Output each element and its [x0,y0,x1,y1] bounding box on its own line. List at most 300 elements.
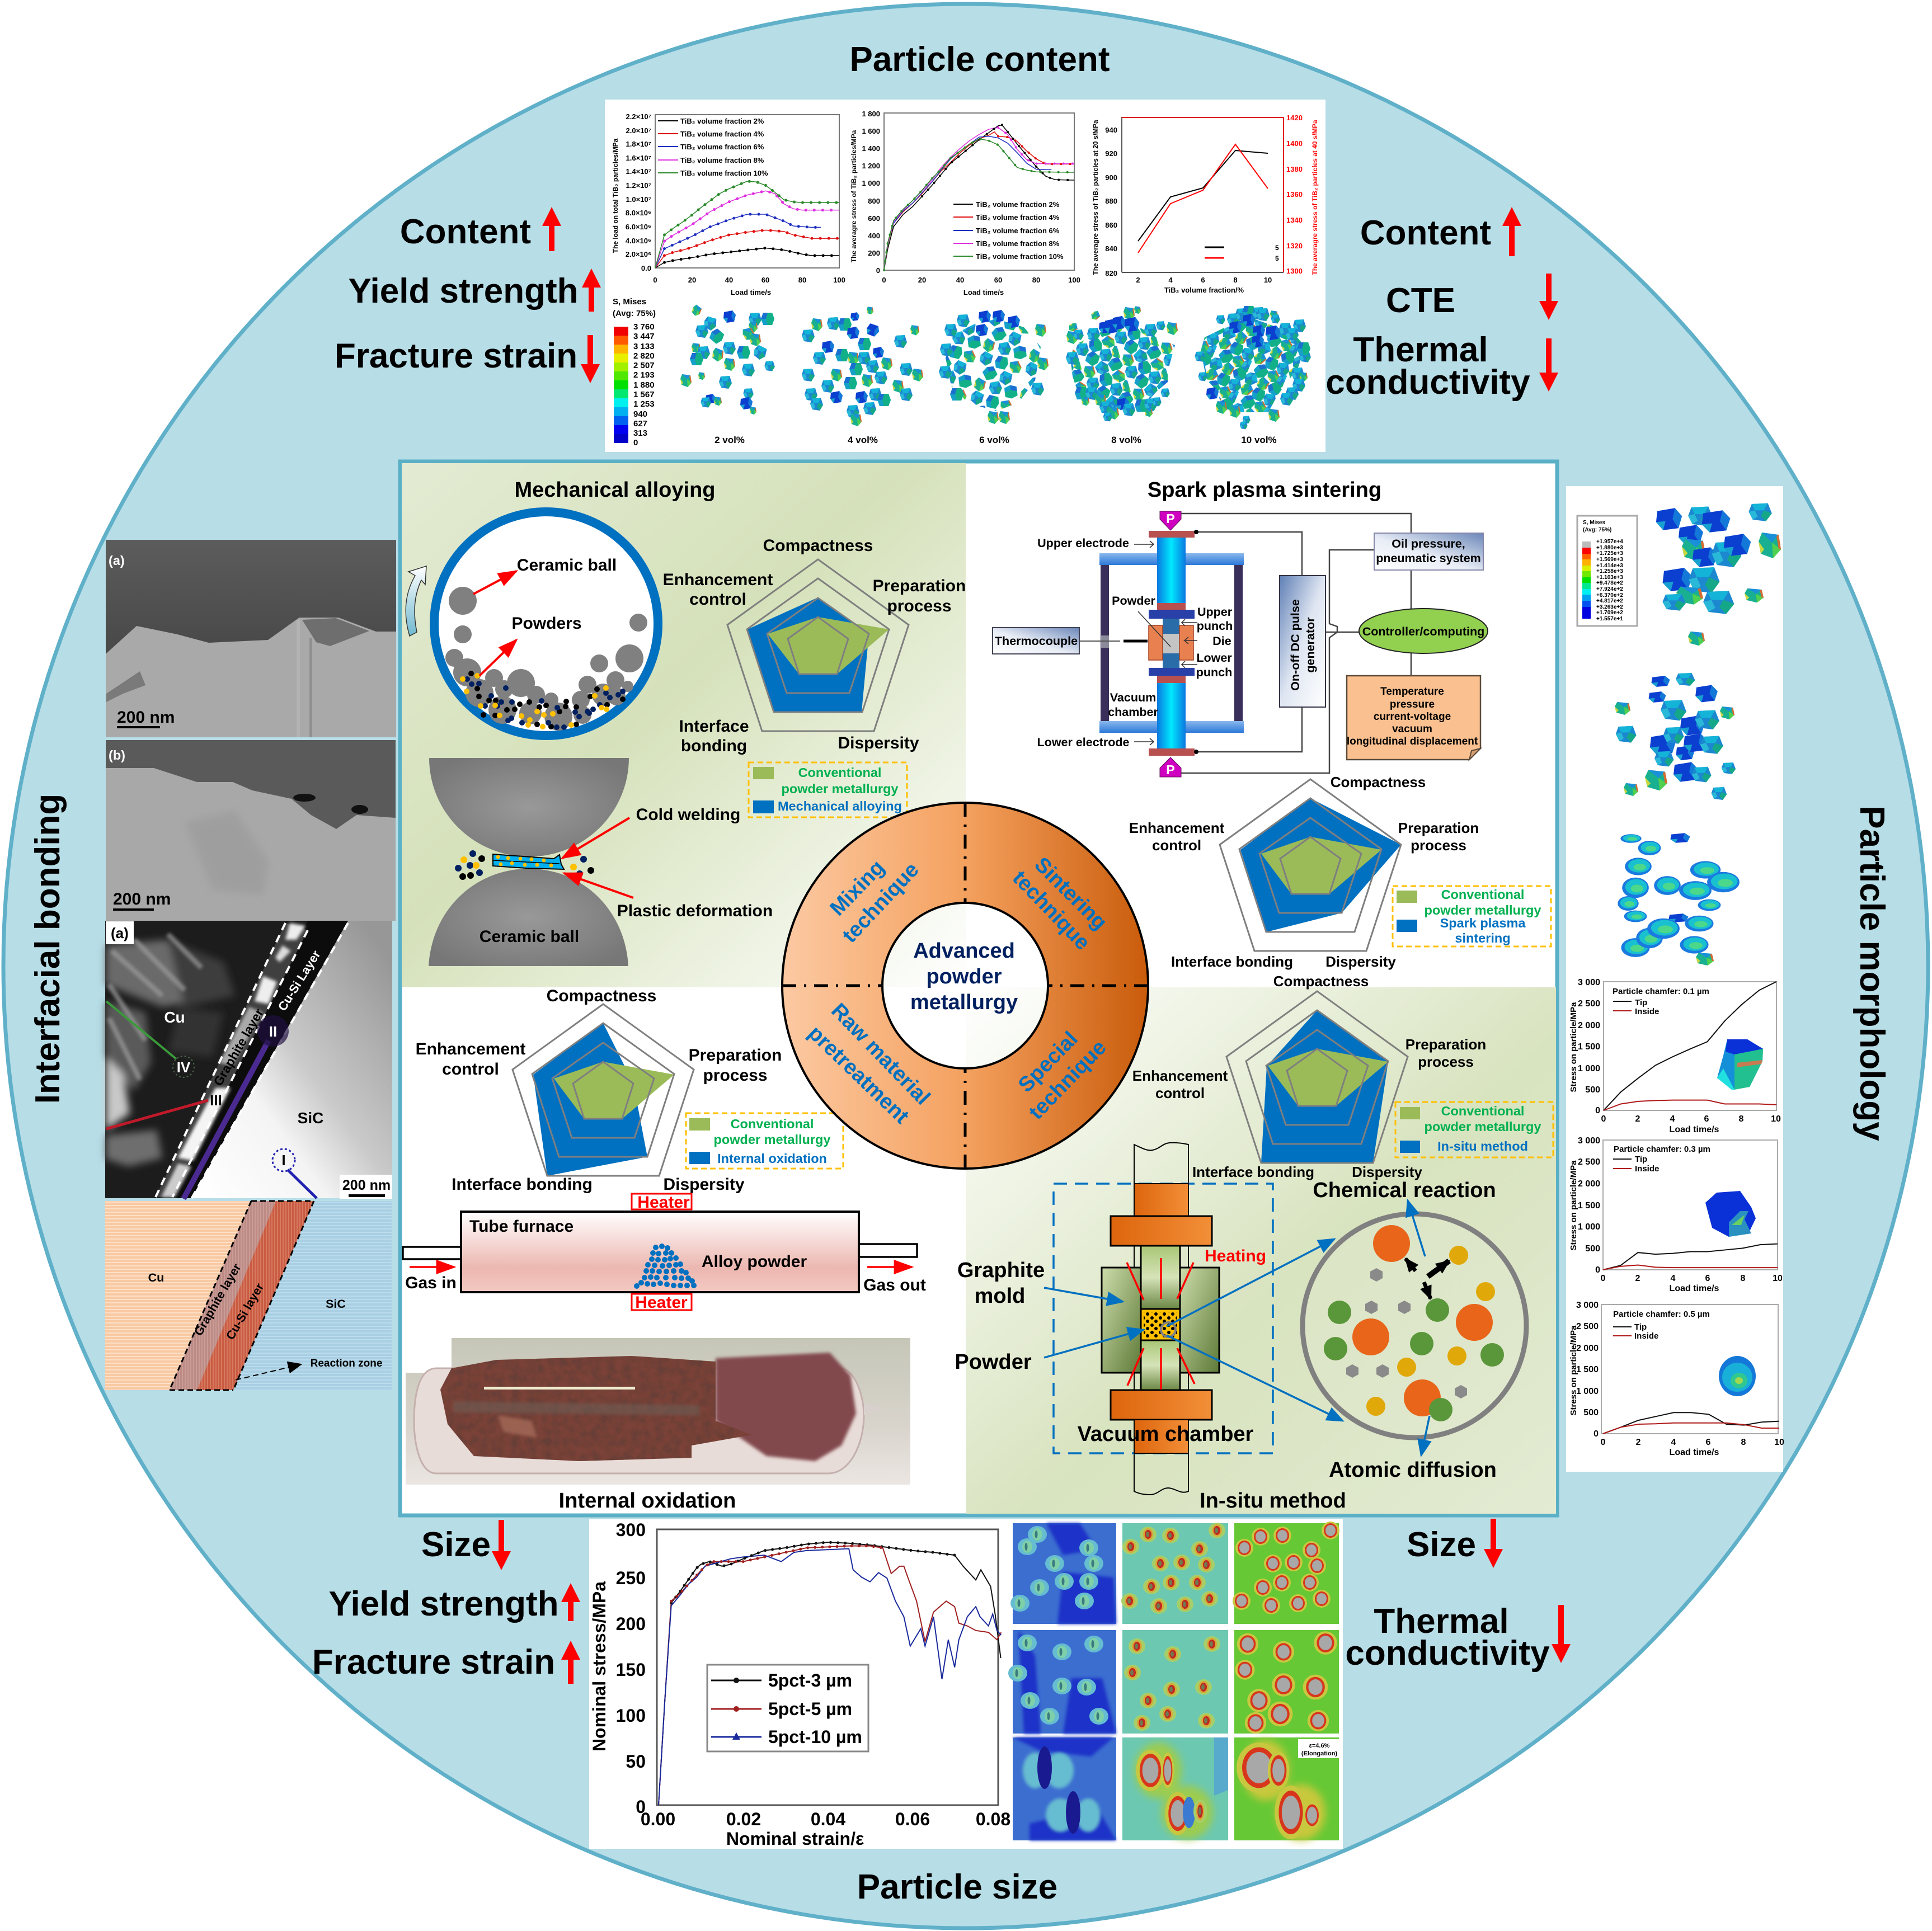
SPS apparatus: Lower [1196,651,1232,665]
bottom right effects: Thermal [1374,1602,1509,1641]
line chart: average stress: 60 [994,276,1002,284]
legend: internal oxidation [686,1113,843,1169]
box: thermocouple [993,628,1079,654]
line chart: chamfer 0.5 µm: 1 500 [1576,1365,1599,1374]
stress legend: +6.370e+2 [1596,592,1623,599]
top right effects: CTE [1386,281,1455,320]
top left effects: Fracture strain [335,337,577,375]
particle cloud: 2 vol%: 2 vol% [714,435,745,445]
legend: internal oxidation: Internal oxidation [717,1151,827,1166]
line chart: chamfer 0.1 µm: 10 [1771,1114,1781,1124]
line chart: chamfer 0.5 µm: 3 000 [1576,1301,1599,1310]
line chart: load on particles: 0 [653,276,657,284]
TEM image (a) Cu-graphite-SiC interface: 200 nm [342,1178,391,1193]
line chart: nominal stress-strain: 0.00 [641,1809,675,1829]
particle cloud: 10 vol% [1195,306,1311,445]
line chart: chamfer 0.1 µm: Particle chamfer: 0.1 µm [1613,987,1709,996]
line chart: load on particles: 1.6×10⁷ [626,154,651,162]
strain heat maps: (Elongation) [1301,1750,1337,1757]
line chart: nominal stress-strain [589,1520,1010,1849]
line chart: nominal stress-strain: Nominal stress/MPa [589,1581,609,1751]
line chart: chamfer 0.3 µm [1569,1136,1783,1293]
schematic: reaction zone: Cu [148,1271,164,1284]
central donut: pretreatment [803,1021,914,1128]
colour legend: S, Mises: 1 880 [633,380,655,390]
note: parameters: pressure [1390,699,1435,710]
caption: in-situ method: In-situ method [1200,1489,1346,1513]
heading: interfacial bonding: Interfacial bonding [29,794,67,1104]
particles: chamfered [1615,673,1736,800]
stress legend: +1.103e+3 [1596,574,1623,581]
line chart: stress vs volume fraction: The averagre stress of TiB₂ particles at 40 s/MPa [1311,120,1319,275]
line chart: chamfer 0.3 µm: 0 [1601,1274,1606,1283]
section: mechanical alloying: Mechanical alloying [515,478,715,502]
line chart: average stress: 1 200 [862,162,880,170]
colour legend: S, Mises: 1 567 [633,390,655,399]
schematic: reaction zone [105,1201,392,1390]
line chart: chamfer 0.1 µm: 2 000 [1578,1021,1600,1030]
powder heap [634,1244,697,1289]
line chart: stress vs volume fraction: 10 [1264,276,1272,284]
particle cloud: 4 vol%: 4 vol% [848,435,878,445]
strain heat maps: ε=4.6% [1309,1742,1330,1749]
line chart: chamfer 0.5 µm: 0 [1593,1429,1599,1439]
SPS apparatus: Powder [1112,594,1155,607]
line chart: nominal stress-strain: 150 [616,1660,646,1680]
line chart: load on particles: TiB₂ volume fraction 8% [680,156,764,164]
note: parameters: Temperature [1380,686,1444,698]
line chart: stress vs volume fraction: 940 [1105,126,1117,134]
TEM image (b): 200 nm [113,890,171,908]
heading: particle morphology: Particle morphology [1853,806,1891,1141]
SPS apparatus: Upper electrode [1037,536,1129,550]
schematic: reaction zone: Reaction zone [311,1358,382,1369]
top right effects: Content [1360,214,1491,252]
line chart: chamfer 0.1 µm: 2 [1635,1114,1640,1124]
central donut: technique [838,858,924,948]
line chart: stress vs volume fraction: 1420 [1286,114,1303,122]
stress legend: +1.957e+4 [1596,539,1623,545]
legend: mechanical alloying: Conventional [798,765,881,780]
line chart: chamfer 0.5 µm: 1 000 [1576,1387,1599,1396]
line chart: nominal stress-strain: 0.06 [895,1809,930,1829]
stress legend: +1.880e+3 [1596,545,1623,551]
line chart: chamfer 0.5 µm: 2 [1636,1438,1641,1447]
heading: particle content: Particle content [849,40,1110,79]
stress legend: +7.924e+2 [1596,586,1623,592]
line chart: load on particles: 80 [798,276,806,284]
line chart: average stress: TiB₂ volume fraction 2% [976,200,1060,209]
line chart: chamfer 0.1 µm: 8 [1739,1114,1744,1124]
line chart: chamfer 0.1 µm: Stress on particle/MPa [1569,1002,1578,1092]
colour legend: S, Mises: 0 [633,438,638,448]
centre title: metallurgy [910,991,1018,1014]
line chart: chamfer 0.3 µm: Stress on particle/MPa [1569,1160,1578,1250]
line chart: chamfer 0.1 µm: 500 [1585,1085,1600,1095]
stress legend: +1.258e+3 [1596,568,1623,574]
stress legend: (Avg: 75%) [1583,527,1611,533]
strain heat maps [1008,1522,1340,1840]
radar chart: spark plasma sintering [1129,774,1479,970]
stress legend: +3.263e+2 [1596,604,1623,610]
line chart: load on particles: 60 [761,276,769,284]
radar chart: spark plasma sintering: Enhancement [1129,820,1225,836]
central donut: Raw material [826,999,934,1110]
cold welding diagram: Plastic deformation [617,902,773,920]
line chart: chamfer 0.1 µm: Tip [1635,998,1647,1007]
particles: sharp [1656,503,1781,646]
line chart: chamfer 0.5 µm: 4 [1671,1438,1676,1447]
ellipse: controller [1359,609,1488,653]
line chart: chamfer 0.5 µm: 8 [1741,1438,1746,1447]
diagram: tube furnace: Alloy powder [702,1252,807,1271]
colour legend: S, Mises [613,297,656,448]
line chart: average stress: 1 400 [862,144,880,153]
TEM image (a) [106,540,396,737]
panel: particle size figures [589,1519,1343,1849]
bottom left effects: Fracture strain [312,1643,555,1682]
line chart: stress vs volume fraction: 840 [1105,244,1117,253]
diagram: in-situ sintering press: mold [975,1284,1025,1308]
line chart: stress vs volume fraction: 820 [1105,269,1117,277]
line chart: average stress: 20 [918,276,926,284]
TEM image (a) Cu-graphite-SiC interface: II [269,1023,277,1040]
bottom right effects: Size [1407,1525,1476,1564]
TEM image (a) Cu-graphite-SiC interface: I [281,1152,286,1169]
box: on-off DC pulse generator: On-off DC pulse [1289,599,1302,691]
box: on-off DC pulse generator [1280,576,1325,707]
line chart: load on particles: 6.0×10⁶ [626,223,651,231]
line chart: nominal stress-strain: Nominal strain/ε [726,1829,864,1849]
diagram: tube furnace: Gas out [863,1276,926,1294]
line chart: average stress: 40 [956,276,964,284]
line chart: average stress: 1 600 [862,127,880,135]
TEM image (a) Cu-graphite-SiC interface: Cu [164,1009,185,1026]
central donut: technique [1024,1036,1111,1124]
line chart: chamfer 0.5 µm [1569,1301,1784,1457]
icon: rotation arrow [406,566,426,636]
diagram: in-situ sintering press: Graphite [957,1259,1045,1282]
bottom left effects: Yield strength [328,1585,559,1623]
diagram: in-situ reaction circle: Chemical reaction [1313,1179,1496,1202]
SPS apparatus: P [1166,511,1175,526]
line chart: average stress: 800 [868,197,880,205]
legend: internal oxidation: Conventional [731,1117,814,1131]
line chart: stress vs volume fraction: 8 [1233,276,1238,284]
radar chart: in-situ method: control [1155,1085,1205,1101]
line chart: chamfer 0.5 µm: 2 000 [1576,1344,1599,1353]
radar chart: spark plasma sintering: Preparation [1398,820,1479,836]
line chart: chamfer 0.5 µm: 500 [1583,1408,1599,1417]
chart legend: 5pct-10 µm [768,1727,862,1747]
TEM image (a) Cu-graphite-SiC interface: III [210,1092,222,1109]
central donut: Special [1014,1027,1083,1097]
chart legend [707,1665,868,1751]
note: parameters: vacuum [1392,723,1432,735]
top right effects: Thermal [1353,331,1488,369]
line chart: load on particles: 0.0 [641,264,651,272]
radar chart: internal oxidation: process [703,1066,768,1085]
radar chart: internal oxidation [416,987,782,1194]
line chart: load on particles: 1.2×10⁷ [626,181,651,190]
line chart: stress vs volume fraction: 6 [1201,276,1205,284]
line chart: chamfer 0.1 µm: 0 [1595,1106,1600,1115]
line chart: chamfer 0.3 µm: Tip [1635,1155,1647,1164]
cold welding diagram: Cold welding [636,806,740,824]
line chart: chamfer 0.3 µm: 3 000 [1578,1136,1600,1146]
line chart: nominal stress-strain: 250 [616,1568,646,1588]
line chart: load on particles: The load on total TiB₂ particles/MPa [612,138,619,253]
TEM image (a) Cu-graphite-SiC interface: Graphite layer [210,1006,266,1088]
diagram: in-situ sintering press: Vacuum chamber [1078,1423,1254,1446]
ellipse: controller: Controller/computing [1362,625,1484,638]
line chart: load on particles: 4.0×10⁶ [626,237,651,245]
line chart: nominal stress-strain: 300 [616,1520,646,1540]
radar chart: internal oxidation: Preparation [689,1046,782,1065]
colour legend: S, Mises: 2 193 [633,370,655,380]
radar chart: in-situ method: Interface bonding [1192,1164,1314,1180]
line chart: chamfer 0.3 µm: 4 [1671,1274,1676,1283]
SPS apparatus: Die [1212,634,1231,648]
line chart: chamfer 0.3 µm: 2 500 [1578,1157,1600,1167]
chart legend: 5pct-3 µm [768,1670,852,1690]
schematic: reaction zone: SiC [326,1297,346,1311]
diagram: in-situ sintering press: Heating [1205,1247,1266,1265]
top left effects: Yield strength [348,272,579,310]
line chart: chamfer 0.5 µm: Load time/s [1670,1448,1719,1457]
stress legend [1577,516,1637,626]
SPS apparatus: P [1166,762,1175,777]
particle cloud: 6 vol% [939,310,1049,445]
legend: mechanical alloying: Mechanical alloying [778,799,902,813]
line chart: chamfer 0.1 µm: Load time/s [1670,1125,1719,1134]
radar chart: in-situ method [1132,973,1486,1180]
line chart: chamfer 0.3 µm: Inside [1635,1164,1659,1174]
line chart: chamfer 0.1 µm: 4 [1670,1114,1675,1124]
line chart: chamfer 0.5 µm: 2 500 [1576,1322,1599,1331]
line chart: chamfer 0.5 µm: Stress on particle/MPa [1569,1325,1578,1415]
line chart: stress vs volume fraction: 5 [1275,255,1279,262]
line chart: stress vs volume fraction: 1380 [1286,165,1303,173]
radar chart: spark plasma sintering: process [1411,837,1466,854]
line chart: chamfer 0.3 µm: Load time/s [1670,1284,1719,1293]
line chart: chamfer 0.3 µm: 2 000 [1578,1179,1600,1189]
radar chart: internal oxidation: Compactness [547,987,656,1005]
line chart: average stress: TiB₂ volume fraction 8% [976,239,1060,248]
line chart: chamfer 0.5 µm: Particle chamfer: 0.5 µm [1613,1310,1710,1319]
ball mill jar: Powders [511,614,582,633]
legend: mechanical alloying [749,762,907,817]
section: mechanical alloying [406,478,773,966]
particle cloud: 4 vol% [802,307,923,445]
legend: spark plasma sintering: sintering [1455,931,1511,945]
diagram: tube furnace: Gas in [405,1274,457,1292]
diagram: tube furnace: Tube furnace [469,1217,574,1236]
line chart: average stress: Load time/s [963,288,1004,296]
stress legend: +1.569e+3 [1596,557,1623,563]
SPS apparatus: punch [1196,666,1232,679]
line chart: nominal stress-strain: 50 [626,1751,646,1772]
radar chart: internal oxidation: Interface bonding [452,1175,593,1194]
TEM image (a) Cu-graphite-SiC interface: Cu-Si Layer [275,948,323,1013]
box: oil pressure: pneumatic system [1376,552,1481,565]
particle cloud: 8 vol% [1066,306,1178,445]
panel: interfacial bonding images [105,540,396,1390]
line chart: nominal stress-strain: 0 [636,1797,646,1817]
central donut: Sintering [1030,853,1112,935]
box: oil pressure: Oil pressure, [1392,537,1465,550]
centre title: Advanced [913,939,1015,963]
line chart: average stress [850,110,1080,296]
line chart: chamfer 0.3 µm: 0 [1595,1265,1600,1275]
central donut [782,803,1148,1169]
bottom right effects: conductivity [1345,1634,1550,1673]
line chart: chamfer 0.5 µm: 6 [1706,1438,1711,1447]
line chart: chamfer 0.1 µm: 3 000 [1578,978,1600,987]
radar chart: mechanical alloying [663,536,966,755]
line chart: stress vs volume fraction: 1340 [1286,216,1303,224]
legend: in-situ method: powder metallurgy [1425,1119,1541,1134]
line chart: stress vs volume fraction: 1300 [1286,267,1303,275]
radar chart: spark plasma sintering: Compactness [1331,774,1426,790]
line chart: chamfer 0.3 µm: 6 [1705,1274,1710,1283]
line chart: chamfer 0.5 µm: 10 [1774,1438,1784,1447]
line chart: average stress: 400 [868,232,880,240]
stress legend: +1.414e+3 [1596,563,1623,569]
legend: in-situ method: Conventional [1441,1104,1524,1118]
legend: in-situ method [1395,1102,1553,1157]
diagram: tube furnace [403,1193,926,1312]
radar chart: internal oxidation: Dispersity [663,1175,745,1194]
centre title: powder [926,965,1002,988]
box: oil pressure [1374,533,1483,570]
box: thermocouple: Thermocouple [995,634,1078,648]
line chart: average stress: The averagre stress of TiB₂ particles/MPa [850,130,858,262]
colour legend: S, Mises: 3 447 [633,332,655,341]
radar chart: in-situ method: process [1418,1053,1474,1070]
line chart: chamfer 0.1 µm: 2 500 [1578,999,1600,1009]
line chart: stress vs volume fraction: 2 [1136,276,1140,284]
particle cloud: 8 vol%: 8 vol% [1111,435,1141,445]
line chart: average stress: 200 [868,249,880,257]
TEM image (a): 200 nm [117,708,175,727]
TEM image (a) Cu-graphite-SiC interface: (a) [111,925,129,941]
diagram: tube furnace: Heater [637,1193,690,1212]
line chart: load on particles: 2.0×10⁶ [626,250,651,258]
line chart: load on particles: 100 [833,276,845,284]
particles: rounded [1618,833,1740,966]
SPS apparatus: punch [1197,619,1233,633]
line chart: load on particles: TiB₂ volume fraction 10% [680,169,768,177]
section: spark plasma sintering: Spark plasma sintering [1148,478,1381,502]
caption: internal oxidation: Internal oxidation [559,1489,736,1513]
diagram: in-situ reaction circle: Atomic diffusion [1329,1458,1497,1482]
line chart: load on particles: Load time/s [731,288,771,296]
line chart: load on particles: TiB₂ volume fraction 6% [680,143,764,151]
SPS apparatus: chamber [1108,705,1158,719]
stress legend: +4.817e+2 [1596,598,1623,604]
SPS wiring [1178,514,1411,773]
line chart: average stress: 1 800 [862,110,880,118]
line chart: chamfer 0.1 µm [1569,978,1781,1134]
diagram: in-situ reaction circle [1167,1179,1526,1482]
line chart: average stress: 0 [882,276,886,284]
line chart: chamfer 0.1 µm: 1 500 [1578,1042,1600,1052]
stress legend: +9.478e+2 [1596,580,1623,586]
radar chart: mechanical alloying: Preparation [873,577,966,595]
colour legend: S, Mises: 940 [633,409,647,419]
line chart: nominal stress-strain: 200 [616,1614,646,1634]
TEM image (b): (b) [109,748,125,762]
line chart: average stress: 1 000 [862,179,880,187]
line chart: average stress: 80 [1032,276,1040,284]
diagram: tube furnace: Heater [635,1293,688,1312]
legend: internal oxidation: powder metallurgy [714,1132,830,1147]
radar chart: spark plasma sintering: Dispersity [1325,953,1396,970]
line chart: stress vs volume fraction: 860 [1105,221,1117,229]
line chart: stress vs volume fraction: 920 [1105,149,1117,158]
particle cloud: 2 vol% [680,304,775,445]
line chart: stress vs volume fraction: 880 [1105,197,1117,205]
colour legend: S, Mises: 627 [633,419,647,428]
TEM image (a) Cu-graphite-SiC interface [105,921,392,1199]
central donut: technique [1008,866,1094,955]
colour legend: S, Mises: 3 133 [633,342,655,351]
bottom right effects [1345,1519,1571,1673]
ball mill jar [434,512,658,736]
line chart: average stress: TiB₂ volume fraction 6% [976,227,1060,235]
colour legend: S, Mises: 2 820 [633,351,655,361]
radar chart: mechanical alloying: Enhancement [663,571,773,589]
line chart: chamfer 0.3 µm: 1 000 [1578,1222,1600,1232]
line chart: average stress: 100 [1068,276,1080,284]
photo: internal oxidation tube [406,1338,910,1485]
line chart: chamfer 0.5 µm: Inside [1634,1331,1658,1341]
line chart: stress vs volume fraction: 900 [1105,173,1117,182]
line chart: chamfer 0.3 µm: 10 [1773,1274,1783,1283]
radar chart: spark plasma sintering: control [1152,837,1201,854]
TEM image (a) Cu-graphite-SiC interface: SiC [298,1109,323,1127]
line chart: stress vs volume fraction: The averagre stress of TiB₂ particles at 20 s/MPa [1092,120,1099,275]
ball mill jar: Ceramic ball [517,556,617,574]
line chart: chamfer 0.1 µm: 6 [1704,1114,1709,1124]
line chart: load on particles: 1.8×10⁷ [626,140,651,148]
line chart: stress vs volume fraction: TiB₂ volume fraction/% [1164,286,1244,294]
top right effects [1325,207,1558,402]
diagram: in-situ sintering press: Powder [955,1350,1032,1374]
SPS apparatus: Lower electrode [1037,736,1129,749]
TEM image (a) Cu-graphite-SiC interface: IV [177,1059,191,1076]
legend: spark plasma sintering: powder metallurgy [1425,903,1541,917]
colour legend: S, Mises: 313 [633,428,647,438]
radar chart: mechanical alloying: Compactness [763,536,873,555]
radar chart: in-situ method: Dispersity [1352,1164,1422,1180]
line chart: chamfer 0.5 µm: 0 [1601,1438,1606,1447]
legend: mechanical alloying: powder metallurgy [782,781,898,796]
line chart: nominal stress-strain: 0.02 [726,1809,761,1829]
line chart: stress vs volume fraction [1092,114,1319,294]
panel: particle content figures [605,100,1325,452]
cold welding diagram [429,758,773,966]
line chart: load on particles: 1.0×10⁷ [626,195,651,204]
colour legend: S, Mises: 1 253 [633,399,655,409]
radar chart: internal oxidation: control [442,1060,499,1078]
line chart: chamfer 0.3 µm: Particle chamfer: 0.3 µm [1614,1145,1710,1154]
SPS apparatus [1037,511,1244,777]
line chart: load on particles: 2.2×10⁷ [626,112,651,121]
line chart: stress vs volume fraction: 1320 [1286,242,1303,250]
line chart: chamfer 0.1 µm: 1 000 [1578,1064,1600,1073]
